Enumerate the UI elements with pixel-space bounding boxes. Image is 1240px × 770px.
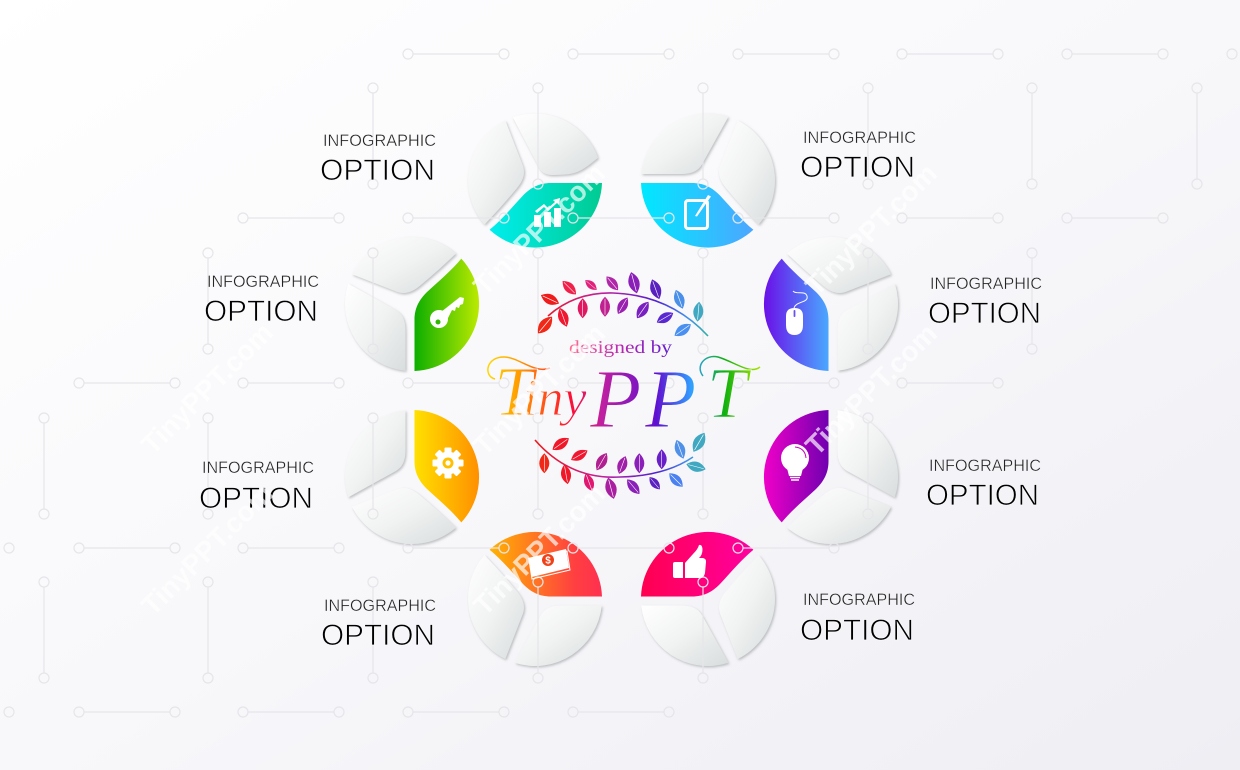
icon: tablet and pencil [686, 195, 711, 228]
Tiny PPT wordmark: iny [523, 370, 587, 427]
label: bottom left: INFOGRAPHIC [324, 597, 436, 615]
label: left upper: INFOGRAPHIC [207, 273, 319, 291]
teal segment [490, 183, 602, 248]
violet segment [764, 259, 828, 371]
circle: right lower, bulb [764, 410, 898, 544]
watermarks: TinyPPT.com [467, 318, 611, 461]
Tiny PPT wordmark: T [707, 353, 752, 433]
gray segments [641, 555, 775, 666]
circle: right upper, mouse [764, 237, 898, 371]
label: right lower: INFOGRAPHIC [929, 457, 1041, 475]
gray segments [468, 555, 602, 666]
icon: bar chart [534, 198, 561, 227]
icon: money: $ [545, 556, 551, 566]
label: left lower [199, 459, 314, 515]
yellow segment [414, 410, 479, 522]
gray segments [468, 114, 598, 224]
label: top left: INFOGRAPHIC [323, 132, 436, 150]
Tiny PPT wordmark [488, 353, 760, 446]
bottom wreath [535, 430, 709, 500]
circle: left lower, gear [345, 410, 479, 544]
gray segments [641, 114, 775, 224]
blue segment [641, 183, 753, 248]
green segment [414, 259, 479, 371]
watermarks: TinyPPT.com [467, 478, 611, 621]
orange segment [490, 532, 602, 596]
Tiny PPT wordmark: P [589, 353, 641, 446]
gray segments [345, 410, 456, 544]
watermarks: TinyPPT.com [135, 478, 279, 621]
icon: light bulb [781, 444, 809, 480]
label: top right [800, 129, 916, 184]
gray segments [787, 410, 898, 544]
label: left upper: OPTION [204, 295, 318, 328]
label: bottom right: INFOGRAPHIC [803, 591, 915, 609]
icon: key [430, 297, 464, 328]
center logo [488, 271, 760, 500]
icon: mouse [786, 291, 807, 335]
icon: thumbs up [673, 545, 706, 578]
label: bottom left [321, 597, 436, 652]
label: top left: OPTION [320, 154, 435, 187]
watermarks: TinyPPT.com [467, 158, 611, 301]
icon: money [528, 549, 570, 579]
label: top left [320, 132, 436, 187]
watermarks: TinyPPT.com [135, 317, 279, 460]
label: right upper: OPTION [928, 297, 1041, 330]
Tiny PPT wordmark: T [495, 354, 539, 431]
magenta segment [764, 410, 828, 522]
label: left lower: INFOGRAPHIC [202, 459, 314, 477]
label: top right: OPTION [800, 151, 915, 184]
gray segments [787, 237, 898, 371]
label: left upper [204, 273, 319, 328]
label: left lower: OPTION [199, 482, 313, 515]
circle: top right, tablet [641, 114, 775, 248]
circle: bottom right, thumb [641, 532, 775, 666]
circle: left upper, key [345, 237, 479, 371]
label: right upper: INFOGRAPHIC [930, 275, 1042, 293]
icon: gear [432, 448, 464, 478]
label: right upper [928, 275, 1042, 330]
watermarks [135, 158, 943, 621]
circle: top left, chart [468, 114, 602, 248]
label: top right: INFOGRAPHIC [803, 129, 916, 147]
watermarks: TinyPPT.com [799, 318, 943, 461]
circle: bottom left, money [468, 532, 602, 666]
designed by: designed by [569, 337, 672, 357]
label: bottom right: OPTION [800, 614, 914, 647]
watermarks: TinyPPT.com [799, 158, 943, 301]
label: bottom left: OPTION [321, 619, 435, 652]
pink segment [641, 532, 753, 596]
top wreath [534, 271, 708, 340]
label: right lower [926, 457, 1041, 512]
label: right lower: OPTION [926, 479, 1039, 512]
gray segments [345, 237, 456, 371]
label: bottom right [800, 591, 915, 647]
Tiny PPT wordmark: P [644, 353, 696, 446]
